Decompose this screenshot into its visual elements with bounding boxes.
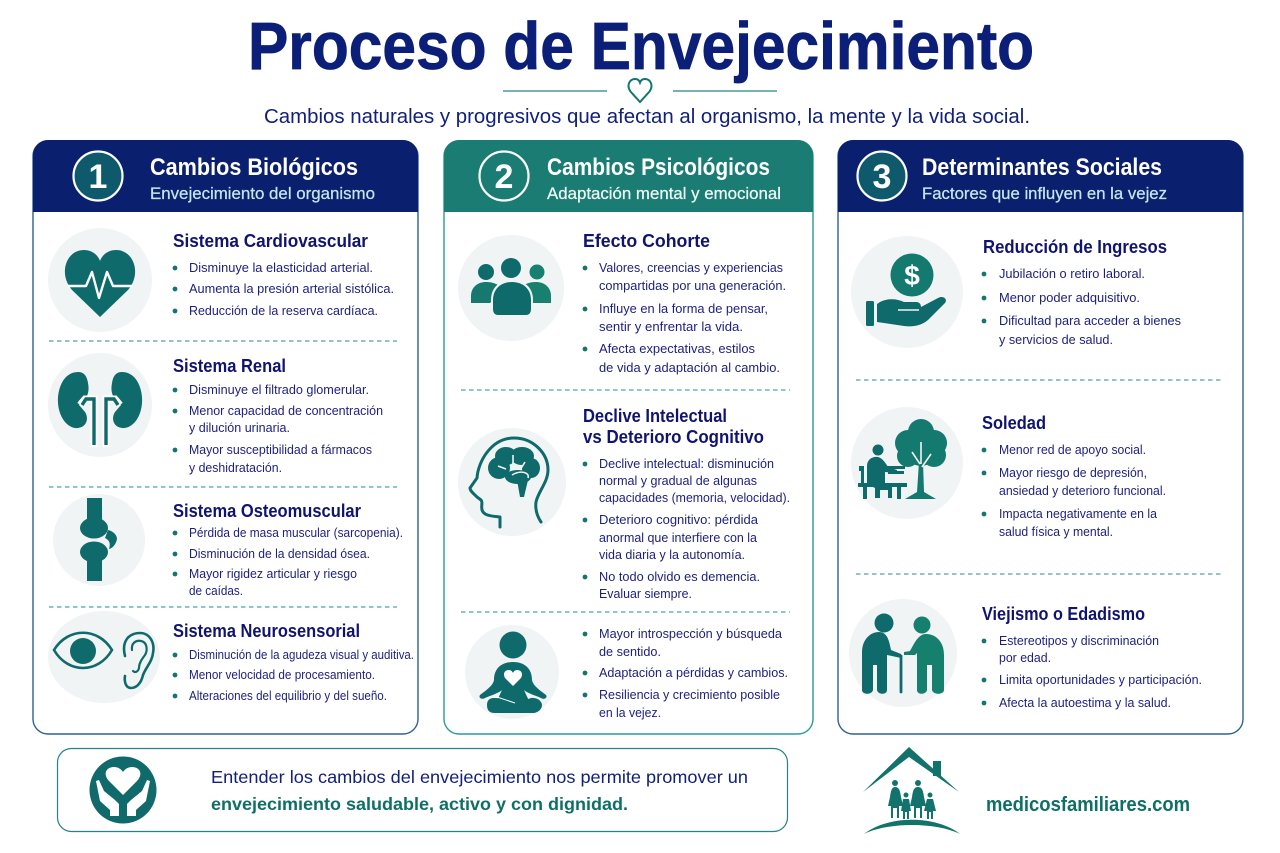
panel header 3 <box>838 140 1243 212</box>
panel header 1 <box>33 140 418 212</box>
bullets: salud física y mental. <box>999 525 1113 539</box>
bullets: Mayor riesgo de depresión, <box>999 466 1147 480</box>
icon: two elderly people with cane <box>849 599 957 707</box>
bullets: ansiedad y deterioro funcional. <box>999 484 1166 498</box>
bullets: Deterioro cognitivo: pérdida <box>599 513 758 527</box>
bullets: Aumenta la presión arterial sistólica. <box>189 282 394 296</box>
item: reduccion de ingresos <box>851 236 1181 348</box>
bullets: Menor capacidad de concentración <box>189 404 383 418</box>
bullets: Reducción de la reserva cardíaca. <box>189 304 378 318</box>
icon: kidneys <box>48 353 152 457</box>
bullets: Menor velocidad de procesamiento. <box>189 668 375 682</box>
item: sistema osteomuscular <box>53 494 403 598</box>
panel header 2: Adaptación mental y emocional <box>547 184 781 203</box>
heading: Efecto Cohorte <box>583 230 710 251</box>
bullets: Valores, creencias y experiencias <box>599 261 783 275</box>
bullets: en la vejez. <box>599 706 661 720</box>
icon: eye and ear <box>48 611 160 703</box>
item: viejismo o edadismo <box>849 599 1202 710</box>
panel header 1: 1 <box>89 158 107 196</box>
panel header 3: 3 <box>873 158 891 196</box>
bullets: Resiliencia y crecimiento posible <box>599 688 780 702</box>
bullets: y deshidratación. <box>189 461 282 475</box>
heading: Sistema Renal <box>173 355 286 376</box>
bullets: anormal que interfiere con la <box>599 531 757 545</box>
bullets <box>982 634 1202 710</box>
panel header 1: Cambios Biológicos <box>150 154 358 181</box>
item: introspeccion <box>465 625 788 720</box>
icon: hand holding coin <box>851 236 963 348</box>
bullets: Mayor susceptibilidad a fármacos <box>189 443 372 457</box>
item: efecto cohorte <box>458 230 786 375</box>
panel header 2 <box>444 140 813 212</box>
bullets <box>173 648 414 703</box>
panel header 1: Envejecimiento del organismo <box>150 184 375 203</box>
message text <box>211 767 748 814</box>
bullets <box>173 526 403 598</box>
bullets: Mayor introspección y búsqueda <box>599 627 782 641</box>
bullets: por edad. <box>999 651 1051 665</box>
bullets: Limita oportunidades y participación. <box>999 673 1202 687</box>
callout: footer message <box>58 748 788 832</box>
bullets <box>982 443 1166 539</box>
title: Proceso de Envejecimiento <box>248 9 1034 84</box>
icon: person on bench with tree <box>851 407 963 519</box>
message text: Entender los cambios del envejecimiento nos permite promover un <box>211 767 748 787</box>
bullets <box>583 457 790 601</box>
bullets <box>173 261 394 318</box>
bullets: compartidas por una generación. <box>599 279 786 293</box>
panel header 3: Determinantes Sociales <box>922 154 1162 181</box>
item: sistema neurosensorial <box>48 611 414 703</box>
heading: Soledad <box>982 412 1046 433</box>
bullets: Disminución de la agudeza visual y auditiva. <box>189 648 414 662</box>
bullets: sentir y enfrentar la vida. <box>599 320 743 334</box>
bullets: capacidades (memoria, velocidad). <box>599 491 790 505</box>
bullets: Pérdida de masa muscular (sarcopenia). <box>189 526 403 540</box>
bullets: Dificultad para acceder a bienes <box>999 314 1181 328</box>
heading: vs Deterioro Cognitivo <box>583 426 764 447</box>
bullets: Alteraciones del equilibrio y del sueño. <box>189 689 387 703</box>
bullets: Impacta negativamente en la <box>999 507 1157 521</box>
icon: meditating person <box>465 625 559 719</box>
bullets: Influye en la forma de pensar, <box>599 302 768 316</box>
bullets: de caídas. <box>189 584 243 598</box>
panel: cambios psicologicos <box>444 140 813 734</box>
website: medicosfamiliares.com <box>986 794 1190 816</box>
panel header 3: Factores que influyen en la vejez <box>922 184 1167 203</box>
bullets: Disminución de la densidad ósea. <box>189 547 370 561</box>
heading: Viejismo o Edadismo <box>982 603 1145 624</box>
bullets: de vida y adaptación al cambio. <box>599 361 780 375</box>
panel header 2: Cambios Psicológicos <box>547 154 770 181</box>
bullets: de sentido. <box>599 645 661 659</box>
bullets: Estereotipos y discriminación <box>999 634 1159 648</box>
item: declive intelectual <box>458 405 790 601</box>
panel header 2: 2 <box>495 158 513 196</box>
icon: group of people <box>458 235 564 341</box>
icon: knee joint <box>53 494 145 586</box>
bullets: y dilución urinaria. <box>189 421 290 435</box>
heading: Sistema Cardiovascular <box>173 230 368 251</box>
title divider with heart <box>503 79 777 102</box>
icon: hand holding coin: $ <box>904 260 920 291</box>
bullets: Jubilación o retiro laboral. <box>999 267 1145 281</box>
bullets: Menor poder adquisitivo. <box>999 291 1140 305</box>
bullets: Mayor rigidez articular y riesgo <box>189 567 357 581</box>
bullets: No todo olvido es demencia. <box>599 570 760 584</box>
bullets <box>982 267 1181 347</box>
heading: Sistema Osteomuscular <box>173 500 361 521</box>
bullets: Afecta expectativas, estilos <box>599 342 755 356</box>
icon: head with brain <box>458 428 566 536</box>
item: sistema cardiovascular <box>48 228 394 332</box>
bullets: vida diaria y la autonomía. <box>599 548 745 562</box>
item: sistema renal <box>48 353 383 475</box>
bullets: Menor red de apoyo social. <box>999 443 1146 457</box>
heading: Sistema Neurosensorial <box>173 620 360 641</box>
bullets: Disminuye la elasticidad arterial. <box>189 261 373 275</box>
heading: Reducción de Ingresos <box>983 236 1167 257</box>
message text: envejecimiento saludable, activo y con dignidad. <box>211 794 628 814</box>
heading: Declive Intelectual <box>583 405 727 426</box>
icon: heart with pulse <box>48 228 152 332</box>
bullets: Declive intelectual: disminución <box>599 457 774 471</box>
bullets: normal y gradual de algunas <box>599 474 757 488</box>
bullets: Disminuye el filtrado glomerular. <box>189 383 369 397</box>
panel: cambios biologicos <box>33 140 418 734</box>
logo: house with family <box>863 747 960 834</box>
bullets <box>173 383 383 475</box>
bullets: Evaluar siempre. <box>599 587 692 601</box>
icon: hands holding heart <box>90 756 156 824</box>
item: soledad <box>851 407 1166 539</box>
bullets <box>583 261 786 375</box>
bullets <box>583 627 788 720</box>
panel: determinantes sociales <box>838 140 1243 734</box>
bullets: Adaptación a pérdidas y cambios. <box>599 666 788 680</box>
bullets: Afecta la autoestima y la salud. <box>999 696 1171 710</box>
heading <box>583 405 764 447</box>
subtitle: Cambios naturales y progresivos que afectan al organismo, la mente y la vida social. <box>264 105 1030 128</box>
bullets: y servicios de salud. <box>999 333 1113 347</box>
